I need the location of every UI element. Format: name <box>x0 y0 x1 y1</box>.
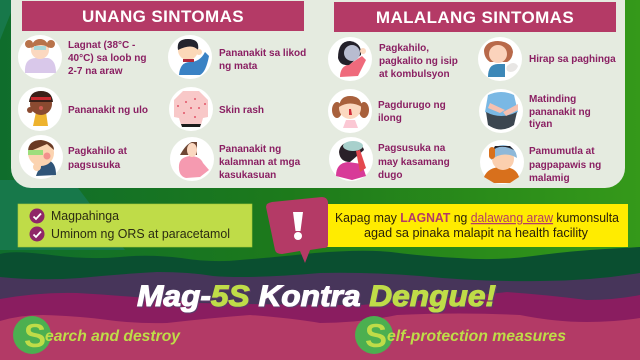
text: pamumutla: pagpapawis ng <box>529 160 601 171</box>
text: pagdurugo ng ilong: Pagdurugo ng <box>378 100 446 111</box>
item: search and destroy: earch and destroy <box>45 328 181 345</box>
panel: symptoms card <box>11 0 625 188</box>
heading: malalang sintomas <box>334 2 616 32</box>
icon: abdomen pain <box>479 89 523 133</box>
text: pananakit ng kalamnan: kasukasuan <box>219 170 276 181</box>
icon: girl with fever in bed <box>18 35 62 79</box>
item: self-protection measures <box>355 316 566 354</box>
icon: boy rubbing eye <box>168 35 212 79</box>
icon: check 1 <box>30 208 44 224</box>
text: pamumutla: Pamumutla at <box>529 146 595 157</box>
icon: woman vomiting blood <box>329 137 373 181</box>
icon: woman short of breath <box>478 37 522 81</box>
text: hirap sa paghinga: Hirap sa paghinga <box>529 54 616 65</box>
text: pagkahilo at pagsusuka: pagsusuka <box>68 160 121 171</box>
icon: pale sweating boy <box>480 140 524 184</box>
text: pananakit ng kalamnan: kalamnan at mga <box>219 157 301 168</box>
text: pagsusuka na may dugo: dugo <box>378 170 402 181</box>
icon: girl with nosebleed <box>328 89 372 133</box>
icon: man with nausea <box>19 135 63 179</box>
title: Mag-5S Kontra Dengue! <box>138 281 497 314</box>
text: pagkahilo pagkalito kombulsyon: pagkalito ng isip <box>379 56 458 67</box>
text: pagkahilo at pagsusuka: Pagkahilo at <box>68 146 128 157</box>
text: pagsusuka na may dugo: Pagsusuka na <box>378 143 446 154</box>
heading: malalang sintomas: MALALANG SINTOMAS <box>376 8 574 27</box>
text: magpahinga: Magpahinga <box>51 209 119 223</box>
icon: check 2 <box>30 226 44 242</box>
heading: unang sintomas <box>22 1 304 31</box>
text: pagsusuka na may dugo: may kasamang <box>378 157 450 168</box>
callout: warning <box>266 197 328 263</box>
panel: home care <box>18 204 252 247</box>
text: matinding pananakit: pananakit ng <box>529 107 591 118</box>
text: matinding pananakit: tiyan <box>529 119 552 130</box>
text: lagnat: 2-7 na araw <box>68 66 123 77</box>
text: pananakit ng kalamnan: Pananakit ng <box>219 144 281 155</box>
item: search and destroy: S <box>24 317 46 354</box>
text: pagdurugo ng ilong: ilong <box>378 113 402 124</box>
text: lagnat: Lagnat (38°C - <box>68 40 135 51</box>
panel: consult notice <box>326 204 628 247</box>
text: pamumutla: malamig <box>529 173 570 184</box>
text: pananakit ng ulo: Pananakit ng ulo <box>68 105 148 116</box>
text: lagnat: 40°C) sa loob ng <box>68 53 146 64</box>
item: self-protection measures: S <box>365 317 387 354</box>
text: skin rash: Skin rash <box>219 105 264 116</box>
panel: consult notice: agad sa pinaka malapit na health facility <box>364 226 589 240</box>
text: pagkahilo pagkalito kombulsyon: Pagkahilo, <box>379 43 429 54</box>
item: search and destroy <box>13 316 181 354</box>
text: matinding pananakit: Matinding <box>529 94 576 105</box>
text: pananakit sa likod ng mata: Pananakit sa likod <box>219 48 306 59</box>
text: pagkahilo pagkalito kombulsyon: at kombulsyon <box>379 69 450 80</box>
text: uminom: Uminom ng ORS at paracetamol <box>51 227 230 241</box>
icon: boy with headache <box>18 87 62 131</box>
panel: consult notice: Kapag may LAGNAT ng dalawang araw kumonsulta <box>335 211 619 225</box>
text: pananakit sa likod ng mata: ng mata <box>219 61 258 72</box>
title: Mag-5S Kontra Dengue! <box>137 280 496 313</box>
icon: woman dizzy <box>328 37 372 81</box>
icon: torso with skin rash <box>169 87 213 131</box>
waves background <box>0 247 640 360</box>
item: self-protection measures: elf-protection measures <box>387 328 566 345</box>
heading: unang sintomas: UNANG SINTOMAS <box>82 7 244 26</box>
icon: woman with muscle pain <box>170 137 214 181</box>
